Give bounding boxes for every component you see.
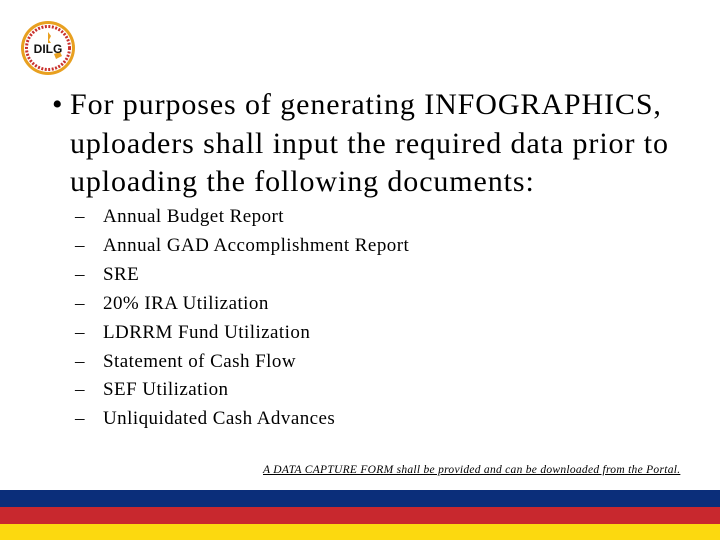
document list: –: [75, 206, 85, 227]
document list: [74, 206, 409, 429]
logo: DILG seal: [21, 21, 75, 75]
document list: –: [75, 322, 85, 343]
main bullet text: uploaders shall input the required data prior to: [70, 126, 669, 160]
document list: –: [75, 408, 85, 429]
main bullet text: uploading the following documents:: [70, 165, 535, 198]
document list: Statement of Cash Flow: [103, 351, 296, 372]
footnote: A DATA CAPTURE FORM shall be provided and can be downloaded from the Portal.: [263, 464, 680, 476]
document list: Unliquidated Cash Advances: [103, 408, 335, 429]
main bullet text: •: [52, 88, 63, 121]
document list: –: [75, 379, 85, 400]
document list: 20% IRA Utilization: [103, 293, 269, 314]
color stripes: [0, 490, 720, 540]
document list: SRE: [103, 264, 139, 285]
document list: SEF Utilization: [103, 379, 228, 400]
main bullet text: For purposes of generating INFOGRAPHICS,: [70, 88, 662, 121]
document list: Annual Budget Report: [103, 206, 284, 227]
document list: –: [75, 351, 85, 372]
document list: –: [75, 264, 85, 285]
document list: –: [75, 235, 85, 256]
document list: LDRRM Fund Utilization: [103, 322, 310, 343]
main bullet text: [52, 88, 669, 198]
document list: Annual GAD Accomplishment Report: [103, 235, 409, 256]
document list: –: [75, 293, 85, 314]
logo: DILG seal: DILG: [34, 42, 62, 56]
